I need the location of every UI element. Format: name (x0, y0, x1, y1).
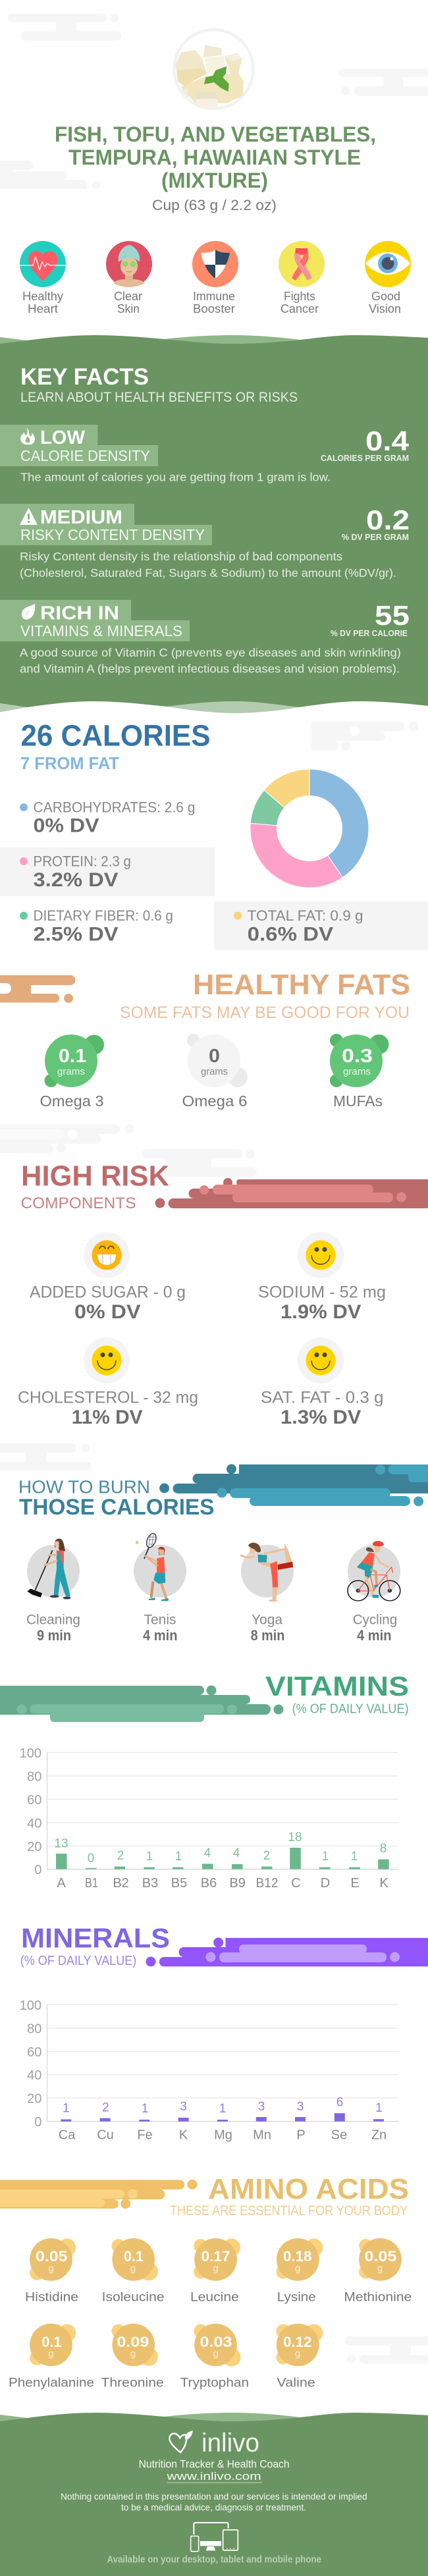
item: cholesterol: 11% DV (72, 1407, 143, 1428)
fact: medium risky content density (0, 504, 410, 579)
teal decoration (159, 1464, 428, 1507)
fact: low calorie density (0, 425, 410, 483)
amino: phenylalanine (9, 2324, 94, 2390)
amino: isoleucine: Isoleucine (102, 2290, 165, 2305)
disclaimer (61, 2491, 367, 2513)
item: sodium: 1.9% DV (281, 1301, 361, 1323)
fact: medium risky content density: % DV PER GRAM (342, 532, 409, 542)
bar chart: vitamins: 80 (27, 1770, 41, 1784)
food photo (174, 30, 253, 109)
bar chart: vitamins: 8 (380, 1842, 387, 1856)
label: yoga: 8 min (251, 1627, 284, 1644)
bar chart: vitamins: B3 (142, 1876, 158, 1891)
purple decoration (146, 1937, 428, 1966)
amino: phenylalanine: g (48, 2348, 54, 2359)
legend: dietary fiber: 2.5% DV (33, 924, 119, 946)
bar chart: vitamins: E (350, 1876, 360, 1891)
website link: www.inlivo.com (166, 2470, 261, 2482)
panel: footer (0, 2413, 428, 2576)
heading: how to burn: THOSE CALORIES (19, 1495, 215, 1520)
bar chart: vitamins: B6 (201, 1876, 217, 1891)
fact: medium risky content density: Risky Content density is the relationship of bad components (20, 550, 342, 563)
amino: tryptophan (180, 2324, 249, 2390)
fact: rich in vitamins and minerals: 55 (375, 600, 410, 631)
title (55, 122, 376, 192)
bar chart: vitamins: 1 (175, 1850, 182, 1864)
bar chart: minerals: P (296, 2128, 306, 2143)
item: added sugar (30, 1232, 186, 1323)
panel: how to burn those calories (0, 1443, 428, 1644)
amino: isoleucine: 0.1 (124, 2248, 144, 2265)
bar chart: vitamins: 60 (27, 1793, 41, 1808)
bar chart: vitamins: 1 (322, 1850, 329, 1864)
bar chart: vitamins: 100 (20, 1746, 41, 1761)
heading: high risk: HIGH RISK (21, 1160, 169, 1193)
label: good vision: Vision (369, 302, 401, 315)
bar chart: vitamins: K (379, 1876, 388, 1891)
bar chart: vitamins: B9 (229, 1876, 246, 1891)
legend: carbohydrates (20, 799, 195, 837)
amino: valine: Valine (277, 2376, 315, 2390)
amino: methionine: 0.05 (365, 2248, 396, 2265)
fact: rich in vitamins and minerals: and Vitamin A (helps prevent infectious diseases and vision problems). (20, 662, 400, 676)
yellow decoration (0, 2180, 428, 2364)
bar chart: vitamins: 1 (146, 1850, 153, 1864)
amino: isoleucine (102, 2238, 165, 2305)
heading: high risk: COMPONENTS (21, 1194, 136, 1212)
label: healthy heart: Heart (28, 302, 58, 315)
icon: fights cancer (279, 241, 325, 287)
bar chart: vitamins: B2 (113, 1876, 129, 1891)
heading: how to burn: HOW TO BURN (18, 1477, 150, 1497)
bar chart: vitamins: 1 (351, 1850, 358, 1864)
label: fights cancer: Cancer (281, 302, 319, 315)
item: sodium: SODIUM - 52 mg (258, 1283, 386, 1302)
amino: threonine: 0.09 (117, 2334, 149, 2350)
legend: carbohydrates: CARBOHYDRATES: 2.6 g (33, 799, 195, 815)
logo: inlivo (169, 2428, 259, 2457)
fact: low calorie density: CALORIES PER GRAM (321, 453, 409, 463)
amino: methionine (344, 2238, 412, 2305)
legend: protein: PROTEIN: 2.3 g (33, 853, 131, 869)
panel: key facts (0, 335, 428, 713)
bar chart: minerals: 1 (219, 2102, 226, 2116)
legend: dietary fiber: DIETARY FIBER: 0.6 g (33, 907, 173, 924)
icon: warning triangle (20, 508, 38, 525)
disclaimer: Nothing contained in this presentation and our services is intended or implied (61, 2491, 367, 2502)
icon row: health benefits (20, 241, 411, 315)
heading: calories (20, 719, 211, 773)
label: healthy heart (22, 290, 63, 315)
panel: header (0, 13, 428, 315)
activity: yoga (240, 1543, 294, 1601)
heading: how to burn (18, 1477, 215, 1520)
amino: histidine: Histidine (25, 2290, 78, 2305)
amino: isoleucine: g (130, 2263, 136, 2274)
label: healthy heart: Healthy (22, 290, 63, 303)
label: clear skin: Skin (117, 302, 140, 315)
bar chart: minerals: 3 (180, 2100, 187, 2114)
icon: healthy heart (20, 241, 66, 287)
label: cleaning: Cleaning (26, 1613, 80, 1628)
bar chart: vitamins: 2 (117, 1849, 124, 1863)
bar chart: vitamins: B5 (171, 1876, 187, 1891)
label: yoga (251, 1613, 284, 1644)
fact: low calorie density: 0.4 (365, 425, 410, 456)
bar chart: minerals: 1 (375, 2101, 383, 2115)
legend: total fat (214, 901, 428, 950)
label: tennis: 4 min (143, 1627, 178, 1644)
label: fights cancer (281, 290, 319, 315)
bar chart: minerals: Mn (253, 2128, 271, 2143)
amino: threonine: g (130, 2348, 136, 2359)
label: cleaning: 9 min (37, 1627, 71, 1644)
heading: minerals: (% OF DAILY VALUE) (20, 1954, 136, 1968)
amino: histidine (25, 2238, 78, 2305)
item: sodium (258, 1232, 386, 1323)
disclaimer: to be a medical advice, diagnosis or treatment. (121, 2502, 306, 2513)
heading: vitamins: VITAMINS (265, 1671, 409, 1702)
amino: threonine: Threonine (101, 2376, 164, 2390)
bar chart: vitamins: C (291, 1876, 301, 1891)
item: saturated fat: 1.3% DV (281, 1407, 361, 1428)
heading: vitamins: (% OF DAILY VALUE) (292, 1702, 409, 1717)
fact: rich in vitamins and minerals: % DV PER CALORIE (331, 628, 408, 638)
amino: lysine: g (295, 2263, 300, 2274)
heading: healthy fats (120, 969, 410, 1022)
label: good vision (369, 290, 401, 315)
amino: leucine: g (213, 2263, 219, 2274)
heading: key facts (20, 364, 298, 405)
fact: rich in vitamins and minerals (0, 600, 410, 676)
stat: omega 3: 0.1 (59, 1046, 86, 1067)
icon: clear skin (106, 241, 152, 287)
bar chart: minerals (20, 1999, 398, 2143)
panel: healthy fats (0, 969, 410, 1110)
bar chart: minerals: 3 (297, 2100, 304, 2114)
label: immune booster: Booster (193, 302, 235, 315)
amino: methionine: g (377, 2263, 383, 2274)
amino: lysine: 0.18 (283, 2248, 312, 2265)
activity: cleaning (27, 1539, 80, 1599)
fact: rich in vitamins and minerals: RICH IN (40, 603, 119, 624)
availability note: Available on your desktop, tablet and mobile phone (107, 2554, 321, 2565)
bar chart: vitamins: 20 (27, 1840, 41, 1854)
legend: total fat: TOTAL FAT: 0.9 g (248, 907, 363, 924)
amino: leucine: 0.17 (201, 2248, 230, 2265)
label: clear skin: Clear (114, 290, 142, 303)
label: cleaning (26, 1613, 80, 1644)
item: added sugar: ADDED SUGAR - 0 g (30, 1283, 186, 1302)
amino: phenylalanine: Phenylalanine (9, 2376, 94, 2390)
label: tennis: Tenis (144, 1613, 176, 1628)
amino: phenylalanine: 0.1 (41, 2334, 61, 2350)
fact: rich in vitamins and minerals: A good source of Vitamin C (prevents eye diseases and skin wrinkling) (20, 646, 401, 659)
label: fights cancer: Fights (284, 290, 315, 303)
label: cycling: Cycling (353, 1613, 397, 1628)
bar chart: vitamins: A (57, 1876, 66, 1891)
heading: key facts: KEY FACTS (20, 364, 149, 390)
icon: leaf (22, 604, 35, 620)
bar chart: minerals: 6 (336, 2095, 343, 2110)
panel: minerals (20, 1922, 428, 2143)
icon: immune booster (192, 241, 238, 287)
logo: inlivo: inlivo (201, 2428, 259, 2457)
stat: mufas: 0.3 (342, 1046, 373, 1067)
icon: flame (20, 428, 35, 444)
fact: rich in vitamins and minerals: VITAMINS & MINERALS (20, 622, 182, 639)
heading: key facts: LEARN ABOUT HEALTH BENEFITS OR RISKS (20, 390, 298, 405)
label: immune booster: Immune (193, 290, 235, 303)
bar chart: vitamins: 13 (54, 1837, 68, 1851)
amino: methionine: Methionine (344, 2290, 412, 2305)
bar chart: vitamins: B1 (85, 1876, 98, 1891)
amino: valine (277, 2324, 323, 2390)
legend: protein: 3.2% DV (33, 869, 119, 891)
bar chart: minerals: 0 (34, 2115, 41, 2130)
fact: medium risky content density: MEDIUM (40, 507, 122, 528)
amino: leucine: Leucine (190, 2290, 239, 2305)
stat: mufas (330, 1034, 388, 1110)
heading: vitamins (265, 1671, 409, 1717)
heading: high risk (21, 1160, 169, 1212)
legend: carbohydrates: 0% DV (33, 815, 99, 837)
stat: mufas: MUFAs (333, 1092, 383, 1110)
heading: calories: 7 FROM FAT (20, 753, 119, 773)
bar chart: vitamins: 0 (34, 1863, 41, 1877)
label: tennis (143, 1613, 178, 1644)
bar chart: minerals: Zn (371, 2128, 387, 2143)
amino: valine: g (295, 2348, 300, 2359)
legend: total fat: 0.6% DV (248, 924, 333, 946)
heading: minerals: MINERALS (21, 1922, 170, 1953)
amino: histidine: g (48, 2263, 54, 2274)
heading: calories: 26 CALORIES (21, 719, 211, 753)
bar chart: minerals: 60 (27, 2045, 41, 2060)
bar chart: minerals: 1 (63, 2101, 70, 2115)
bar chart: vitamins: 0 (88, 1852, 94, 1865)
fact: low calorie density: The amount of calories you are getting from 1 gram is low. (20, 470, 331, 483)
legend: protein (0, 847, 215, 896)
amino: lysine: Lysine (277, 2290, 316, 2305)
bar chart: vitamins: 4 (204, 1846, 211, 1860)
stat: omega 6: 0 (209, 1046, 220, 1067)
amino: tryptophan: 0.03 (200, 2334, 232, 2350)
panel: high risk components (0, 1124, 428, 1428)
bar chart: minerals: Ca (59, 2128, 76, 2143)
fact: medium risky content density: (Cholesterol, Saturated Fat, Sugars & Sodium) to the amount (%DV/gr). (20, 566, 396, 579)
stat: omega 3: Omega 3 (40, 1092, 104, 1110)
fact: low calorie density: CALORIE DENSITY (20, 447, 150, 464)
label: cycling: 4 min (357, 1627, 391, 1644)
label: yoga: Yoga (252, 1613, 282, 1628)
bar chart: minerals: Cu (97, 2128, 114, 2143)
activity: tennis (134, 1532, 186, 1601)
serving size: Cup (63 g / 2.2 oz) (152, 197, 277, 213)
fact: low calorie density: LOW (40, 427, 86, 448)
icon: devices (191, 2523, 238, 2552)
panel: calories (0, 719, 428, 950)
bar chart: minerals: 2 (102, 2101, 109, 2115)
bar chart: vitamins (20, 1746, 398, 1891)
amino: histidine: 0.05 (36, 2248, 67, 2265)
item: cholesterol (18, 1337, 198, 1428)
bar chart: minerals: K (179, 2128, 188, 2143)
amino: leucine (190, 2238, 240, 2305)
title: (MIXTURE) (161, 169, 268, 192)
heading: amino acids (170, 2173, 409, 2218)
stat: omega 6: grams (201, 1066, 228, 1077)
amino: tryptophan: g (213, 2348, 219, 2359)
panel: amino acids (0, 2173, 428, 2390)
bar chart: minerals: 40 (27, 2068, 41, 2083)
fact: medium risky content density: 0.2 (366, 504, 410, 535)
bar chart: vitamins: 18 (288, 1831, 302, 1844)
green decoration (0, 1686, 283, 1722)
legend: dietary fiber (20, 907, 173, 946)
bar chart: vitamins: B12 (255, 1876, 278, 1891)
item: saturated fat: SAT. FAT - 0.3 g (261, 1389, 383, 1407)
title: TEMPURA, HAWAIIAN STYLE (68, 146, 361, 169)
bar chart: vitamins: 4 (233, 1846, 240, 1860)
activity: cycling (348, 1541, 400, 1601)
heading: healthy fats: HEALTHY FATS (193, 969, 410, 1001)
bar chart: minerals: Mg (214, 2128, 232, 2143)
bar chart: vitamins: D (321, 1876, 330, 1891)
heading: amino acids: AMINO ACIDS (208, 2173, 409, 2205)
stat: mufas: grams (343, 1066, 371, 1077)
bar chart: vitamins: 40 (27, 1816, 41, 1831)
heading: minerals (20, 1922, 170, 1968)
amino: valine: 0.12 (283, 2334, 312, 2350)
bar chart: minerals: 20 (27, 2091, 41, 2106)
tagline: Nutrition Tracker & Health Coach (139, 2457, 290, 2470)
label: clear skin (114, 290, 142, 315)
stat: omega 3 (40, 1034, 104, 1110)
bar chart: vitamins: 2 (263, 1849, 270, 1863)
amino: lysine (277, 2238, 323, 2305)
red decoration (155, 1178, 428, 1208)
item: saturated fat (261, 1337, 383, 1428)
label: good vision: Good (371, 290, 400, 303)
bar chart: minerals: 1 (142, 2102, 148, 2116)
label: immune booster (193, 290, 235, 315)
title: FISH, TOFU, AND VEGETABLES, (55, 122, 376, 146)
bar chart: minerals: Fe (137, 2128, 153, 2143)
fact: medium risky content density: RISKY CONTENT DENSITY (20, 526, 205, 543)
icon: good vision (365, 241, 411, 287)
bar chart: minerals: Se (331, 2128, 347, 2143)
bar chart: minerals: 100 (20, 1999, 41, 2013)
amino: tryptophan: Tryptophan (180, 2376, 249, 2390)
item: cholesterol: CHOLESTEROL - 32 mg (18, 1389, 198, 1407)
bar chart: minerals: 80 (27, 2022, 41, 2036)
label: cycling (353, 1613, 397, 1644)
bar chart: minerals: 3 (258, 2100, 265, 2114)
stat: omega 3: grams (57, 1066, 85, 1077)
stat: omega 6 (182, 1034, 248, 1110)
donut chart (250, 769, 369, 888)
heading: healthy fats: SOME FATS MAY BE GOOD FOR YOU (120, 1004, 410, 1022)
stat: omega 6: Omega 6 (182, 1092, 248, 1110)
item: added sugar: 0% DV (74, 1301, 141, 1323)
amino: threonine (101, 2324, 164, 2390)
panel: vitamins (0, 1671, 409, 1891)
